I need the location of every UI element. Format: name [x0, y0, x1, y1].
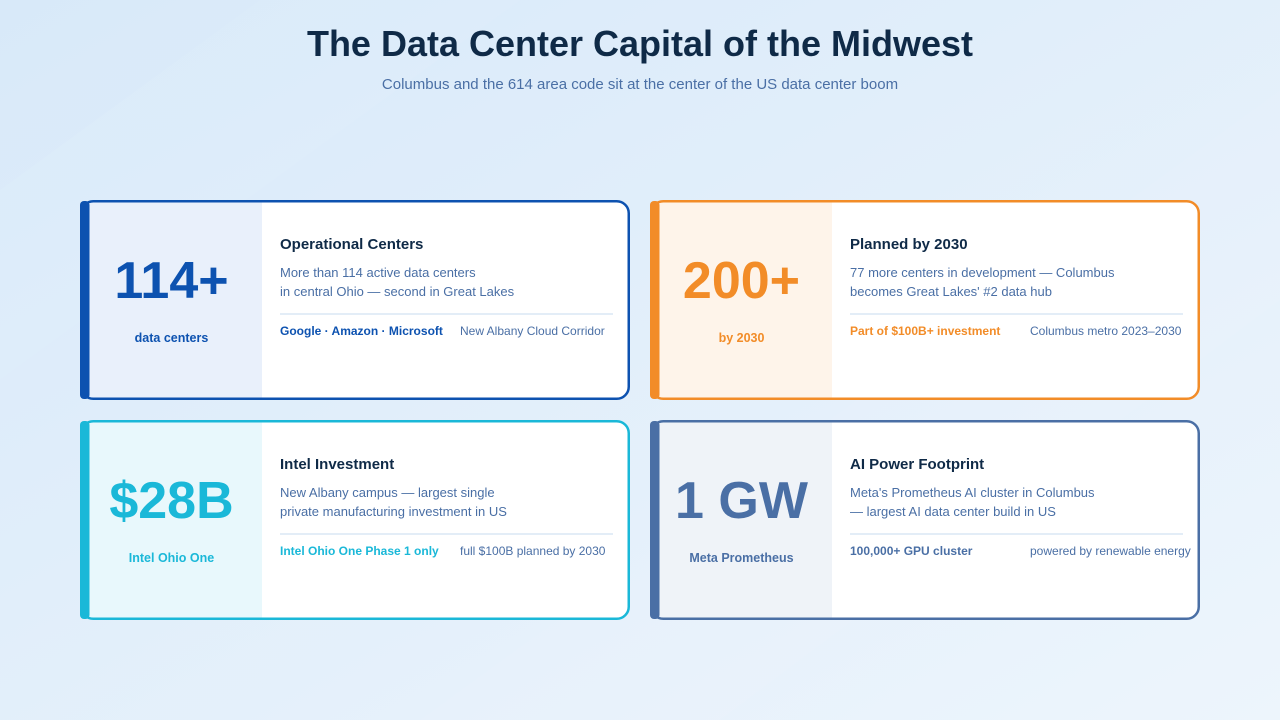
stat label: data centers	[135, 331, 208, 345]
key fact: Part of $100B+ investment	[850, 324, 1000, 338]
accent bar	[80, 421, 90, 619]
description: private manufacturing investment in US	[280, 504, 507, 519]
panel: planned by 2030	[650, 201, 1199, 399]
subtitle: Columbus and the 614 area code sit at the center of the US data center boom	[382, 76, 898, 93]
description: 77 more centers in development — Columbus	[850, 265, 1114, 280]
detail: Columbus metro 2023–2030	[1030, 324, 1182, 338]
card heading: Operational Centers	[280, 236, 423, 253]
stat: 114+: 114+	[114, 252, 229, 310]
accent bar	[650, 201, 660, 399]
description: More than 114 active data centers	[280, 265, 476, 280]
key fact: Intel Ohio One Phase 1 only	[280, 544, 439, 558]
stat label: by 2030	[719, 331, 764, 345]
stat: $28B: $28B	[109, 472, 234, 530]
panel: intel investment	[80, 421, 629, 619]
accent bar	[650, 421, 660, 619]
stat label: Meta Prometheus	[689, 551, 794, 565]
accent bar	[80, 201, 90, 399]
panel: AI power footprint	[650, 421, 1199, 619]
detail: powered by renewable energy	[1030, 544, 1191, 558]
stat label: Intel Ohio One	[129, 551, 214, 565]
panel: operational centers	[80, 201, 629, 399]
description: becomes Great Lakes' #2 data hub	[850, 284, 1052, 299]
card heading: Intel Investment	[280, 456, 394, 473]
card heading: Planned by 2030	[850, 236, 968, 253]
detail: New Albany Cloud Corridor	[460, 324, 605, 338]
stat: 200+: 200+	[683, 252, 800, 310]
title: The Data Center Capital of the Midwest	[307, 23, 973, 64]
description: Meta's Prometheus AI cluster in Columbus	[850, 485, 1095, 500]
key fact: 100,000+ GPU cluster	[850, 544, 973, 558]
stat: 1 GW: 1 GW	[675, 472, 809, 530]
card heading: AI Power Footprint	[850, 456, 984, 473]
description: in central Ohio — second in Great Lakes	[280, 284, 515, 299]
detail: full $100B planned by 2030	[460, 544, 606, 558]
key fact: Google · Amazon · Microsoft	[280, 324, 443, 338]
description: — largest AI data center build in US	[850, 504, 1056, 519]
description: New Albany campus — largest single	[280, 485, 495, 500]
